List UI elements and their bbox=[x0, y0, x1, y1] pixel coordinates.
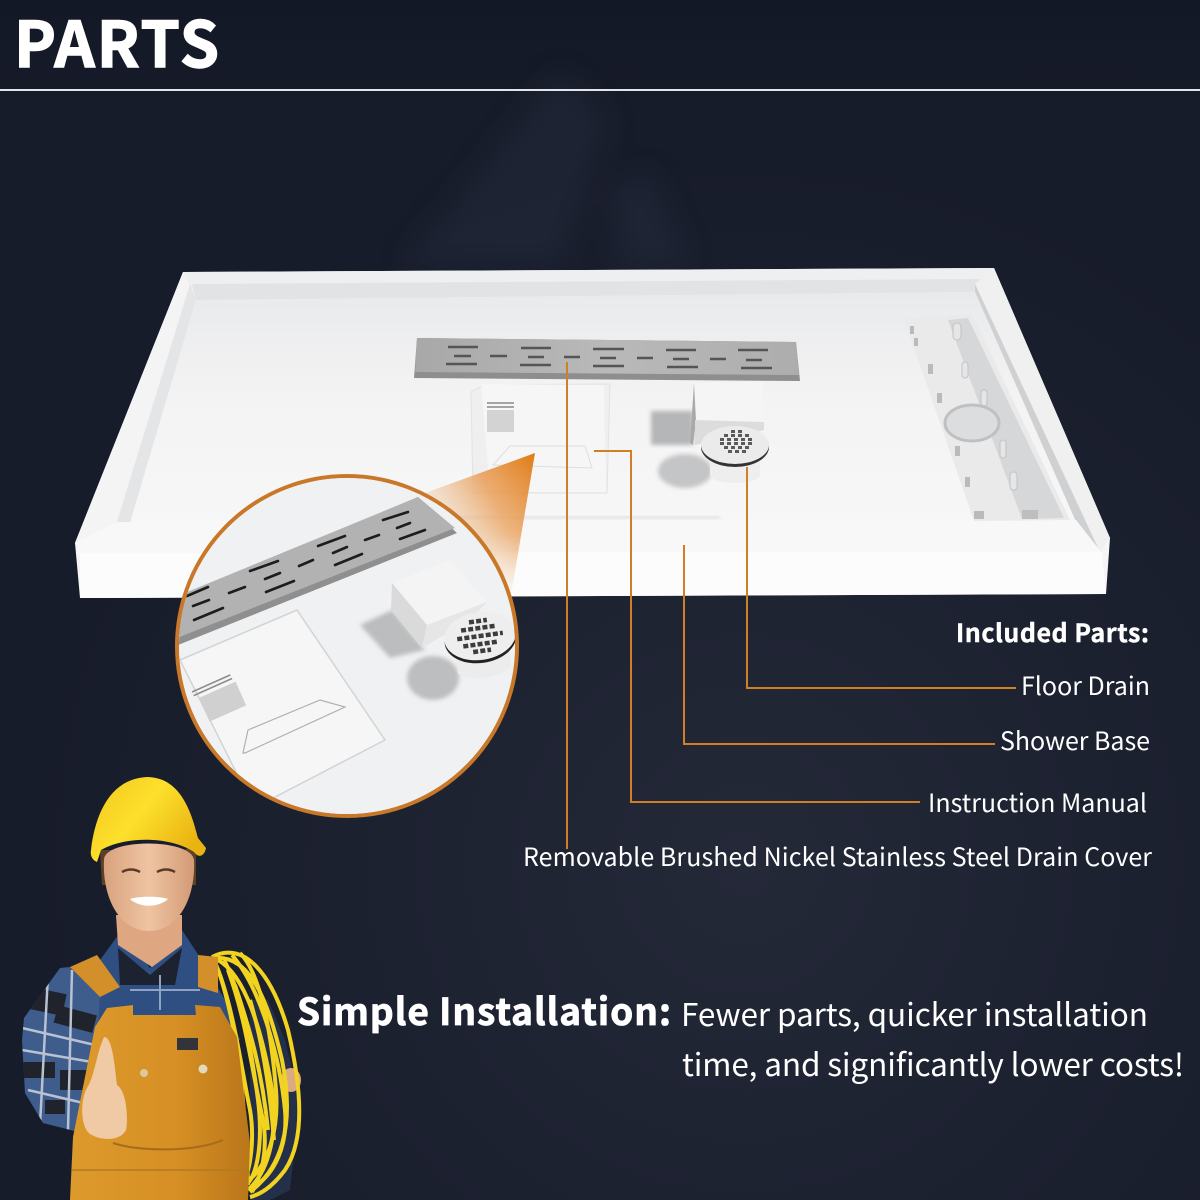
floor drain grate bbox=[701, 426, 769, 483]
tray back rim bbox=[183, 268, 994, 300]
magnified box shadow bbox=[407, 656, 459, 700]
included parts heading: Included Parts: bbox=[956, 614, 1149, 650]
tray left rim bbox=[75, 272, 196, 543]
leader lines bbox=[567, 362, 1016, 849]
tray silhouette bbox=[75, 268, 1110, 598]
label: floor drain: Floor Drain bbox=[1021, 667, 1150, 703]
tray floor bbox=[130, 292, 1076, 523]
floor drain and box on tray bbox=[651, 382, 764, 488]
neck bbox=[116, 915, 182, 967]
installation description bbox=[681, 990, 1184, 1086]
drain flange recess bbox=[904, 314, 1070, 521]
worker illustration bbox=[20, 777, 301, 1200]
leader: instruction manual bbox=[594, 451, 920, 802]
tray front rim bbox=[75, 520, 1102, 556]
simple installation heading: Simple Installation: bbox=[297, 982, 671, 1036]
ears and hair bbox=[100, 845, 196, 885]
leader: floor drain bbox=[747, 467, 1016, 688]
installation description: Fewer parts, quicker installation bbox=[681, 990, 1148, 1036]
leader: shower base bbox=[684, 545, 995, 744]
installation description: time, and significantly lower costs! bbox=[682, 1040, 1184, 1086]
overalls bbox=[70, 1005, 250, 1200]
magnified drain cover bbox=[175, 497, 457, 645]
magnified floor drain bbox=[444, 618, 515, 674]
tray right rim bbox=[975, 268, 1110, 552]
thumbs up hand bbox=[82, 1037, 127, 1139]
instruction manual on tray bbox=[471, 384, 610, 493]
magnifier beam bbox=[426, 453, 535, 592]
hard hat bbox=[91, 777, 206, 862]
face bbox=[104, 844, 194, 931]
cable coil bbox=[212, 953, 299, 1197]
magnified detail circle bbox=[170, 470, 530, 820]
magnified manual bbox=[180, 610, 385, 798]
label: drain cover: Removable Brushed Nickel Stainless Steel Drain Cover bbox=[523, 838, 1152, 874]
shirt sleeve bbox=[20, 967, 100, 1135]
leader: drain cover bbox=[566, 362, 568, 849]
shower base tray bbox=[75, 268, 1110, 598]
label: instruction manual: Instruction Manual bbox=[928, 784, 1147, 820]
far shirt and hand behind coil bbox=[250, 1000, 300, 1200]
shirt torso bbox=[92, 930, 240, 1040]
header rule bbox=[0, 89, 1200, 91]
tray front face bbox=[80, 552, 1106, 598]
magnified box bbox=[391, 583, 486, 648]
drain cover on tray bbox=[414, 338, 800, 381]
label: shower base: Shower Base bbox=[1000, 722, 1150, 758]
